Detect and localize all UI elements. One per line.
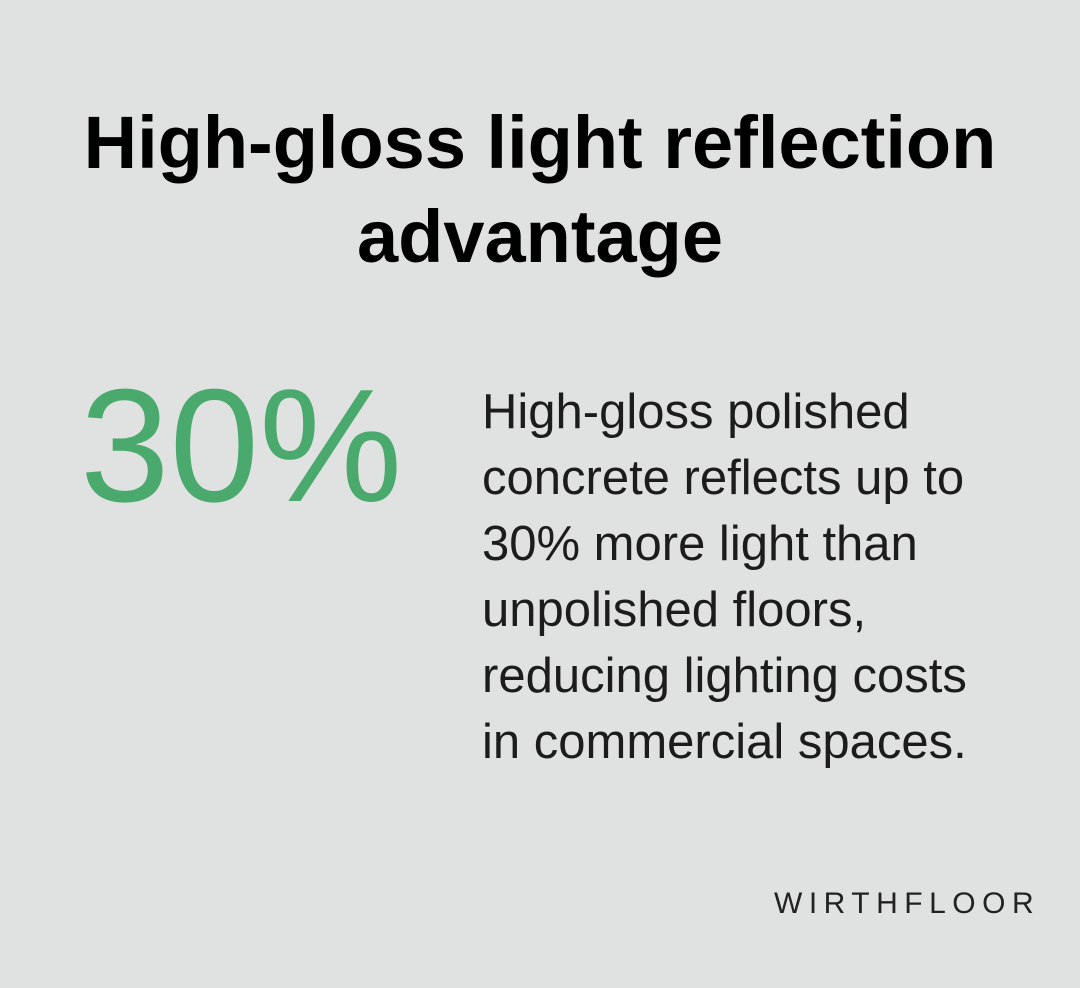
- text block: description: reducing lighting costs: [482, 649, 967, 703]
- title: [84, 101, 996, 278]
- logo: WIRTHFLOOR: WIRTHFLOOR: [774, 887, 1040, 920]
- title: advantage: [357, 195, 723, 278]
- text block: description: in commercial spaces.: [482, 715, 967, 769]
- text block: description: High-gloss polished: [482, 385, 910, 439]
- title: High-gloss light reflection: [84, 101, 996, 184]
- text block: description: concrete reflects up to: [482, 451, 964, 505]
- text block: description: [482, 385, 967, 769]
- text block: description: unpolished floors,: [482, 583, 866, 637]
- stat: 30%: 30%: [80, 356, 402, 536]
- text block: description: 30% more light than: [482, 517, 918, 571]
